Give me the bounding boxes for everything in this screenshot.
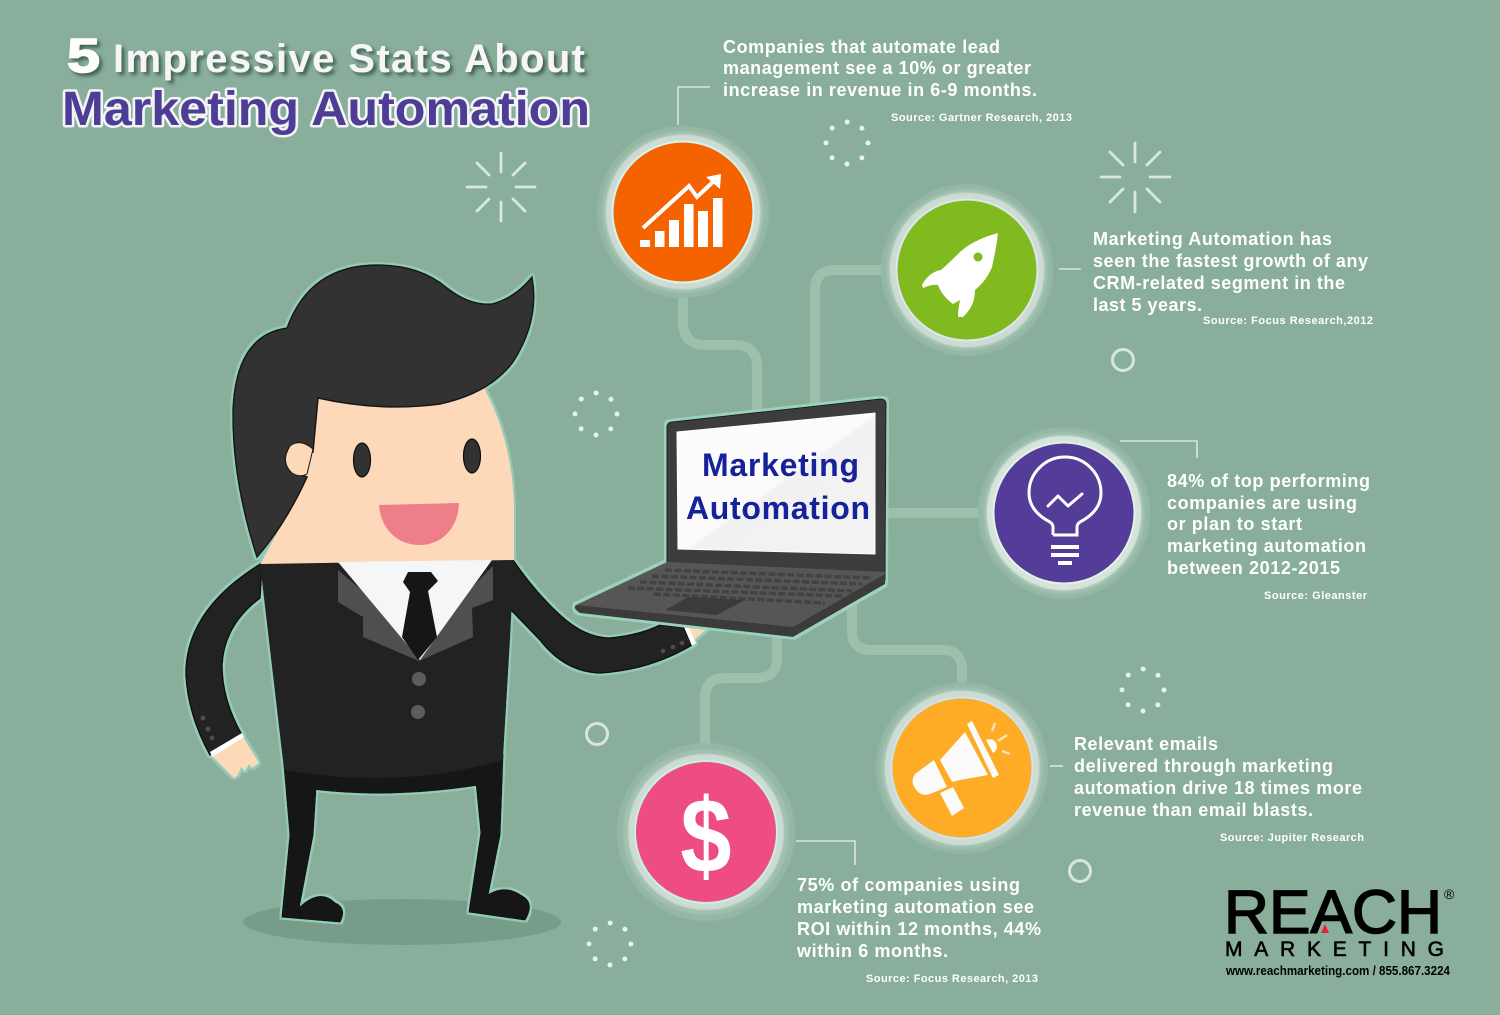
stat 4 text: revenue than email blasts.	[1074, 800, 1313, 820]
reach marketing logo: REACH	[1224, 878, 1442, 946]
stat 4 text: Source: Jupiter Research	[1220, 832, 1364, 844]
icon: lightbulb	[1029, 457, 1101, 563]
stat 3 text	[1167, 471, 1370, 602]
stat 1 text: Source: Gartner Research, 2013	[891, 112, 1072, 124]
decorative sparkles, dots and rings	[467, 122, 1170, 965]
logo marketing wordmark: MARKETING	[1225, 938, 1444, 961]
hand left	[211, 735, 259, 778]
title: marketing automation: Marketing Automation	[62, 83, 590, 136]
stat 4 text	[1074, 734, 1364, 844]
ground shadow	[243, 899, 561, 945]
stat 3 text: companies are using	[1167, 493, 1357, 513]
laptop screen	[677, 413, 875, 554]
shirt collar	[338, 560, 492, 660]
head face	[260, 388, 514, 565]
hand right	[684, 627, 708, 640]
stat 3 text: marketing automation	[1167, 536, 1366, 556]
stat 1 text	[723, 37, 1072, 124]
cuff left	[210, 733, 244, 757]
stat 3 text: or plan to start	[1167, 514, 1302, 534]
connector lines	[683, 270, 985, 755]
icon: rocket	[922, 233, 998, 317]
stat 5 text: Source: Focus Research, 2013	[866, 973, 1038, 985]
businessman character	[186, 265, 708, 922]
screen text: Marketing	[702, 447, 859, 483]
torso jacket	[260, 560, 514, 789]
stat 3 text: between 2012-2015	[1167, 558, 1340, 578]
stat 5 text	[796, 875, 1041, 985]
stat 3 text: 84% of top performing	[1167, 471, 1370, 491]
cuff right	[684, 626, 696, 646]
callout lines	[678, 87, 1197, 865]
icon: bar chart with arrow	[640, 174, 722, 247]
stat 4 circle: megaphone	[876, 682, 1048, 854]
icon: megaphone	[912, 721, 1010, 816]
icon: dollar sign: $	[680, 777, 732, 895]
reach marketing logo	[1224, 878, 1455, 978]
logo red triangle	[1321, 924, 1329, 933]
stat 2 text: Marketing Automation has	[1093, 229, 1332, 249]
stat 2 text: Source: Focus Research,2012	[1203, 315, 1373, 327]
stat 5 text: within 6 months.	[796, 941, 948, 961]
title: Impressive Stats About	[113, 37, 585, 81]
stat 3 circle: lightbulb	[978, 427, 1150, 599]
laptop deck	[575, 562, 885, 636]
screen text: Automation	[686, 490, 870, 526]
logo contact line: www.reachmarketing.com / 855.867.3224	[1225, 964, 1450, 978]
stat 5 text: ROI within 12 months, 44%	[797, 919, 1041, 939]
stat 2 text: last 5 years.	[1093, 295, 1202, 315]
stat 5 circle: dollar	[617, 743, 795, 921]
registered mark: ®	[1444, 886, 1455, 902]
touchpad	[665, 597, 745, 615]
stat 2 text	[1093, 229, 1373, 327]
ear	[285, 443, 313, 476]
stat 2 circle: rocket	[881, 184, 1053, 356]
lapels	[338, 566, 493, 661]
stat 4 text: Relevant emails	[1074, 734, 1218, 754]
stat 2 text: seen the fastest growth of any	[1093, 251, 1368, 271]
eyes	[354, 439, 480, 477]
stat 5 text: 75% of companies using	[797, 875, 1020, 895]
stat 2 text: CRM-related segment in the	[1093, 273, 1345, 293]
mouth	[379, 503, 459, 545]
jacket buttons	[411, 672, 426, 719]
stat 3 text: Source: Gleanster	[1264, 590, 1368, 602]
hair	[233, 265, 534, 557]
legs and shoes	[282, 755, 529, 922]
right arm	[511, 560, 692, 673]
left arm	[186, 563, 262, 755]
stat 1 text: management see a 10% or greater	[723, 58, 1031, 78]
screen text	[686, 447, 870, 526]
jacket hem shade	[284, 760, 502, 794]
sleeve buttons	[200, 641, 684, 740]
stat 1 text: increase in revenue in 6-9 months.	[723, 80, 1037, 100]
keyboard	[628, 570, 872, 603]
stat 1 text: Companies that automate lead	[723, 37, 1000, 57]
laptop	[575, 399, 886, 637]
stat 5 text: marketing automation see	[797, 897, 1034, 917]
necktie	[402, 572, 438, 660]
stat 4 text: delivered through marketing	[1074, 756, 1333, 776]
stat 1 circle: growth chart	[597, 126, 769, 298]
laptop front edge	[575, 574, 885, 637]
title: 5	[67, 30, 100, 83]
laptop lid	[667, 399, 886, 580]
stat 4 text: automation drive 18 times more	[1074, 778, 1362, 798]
